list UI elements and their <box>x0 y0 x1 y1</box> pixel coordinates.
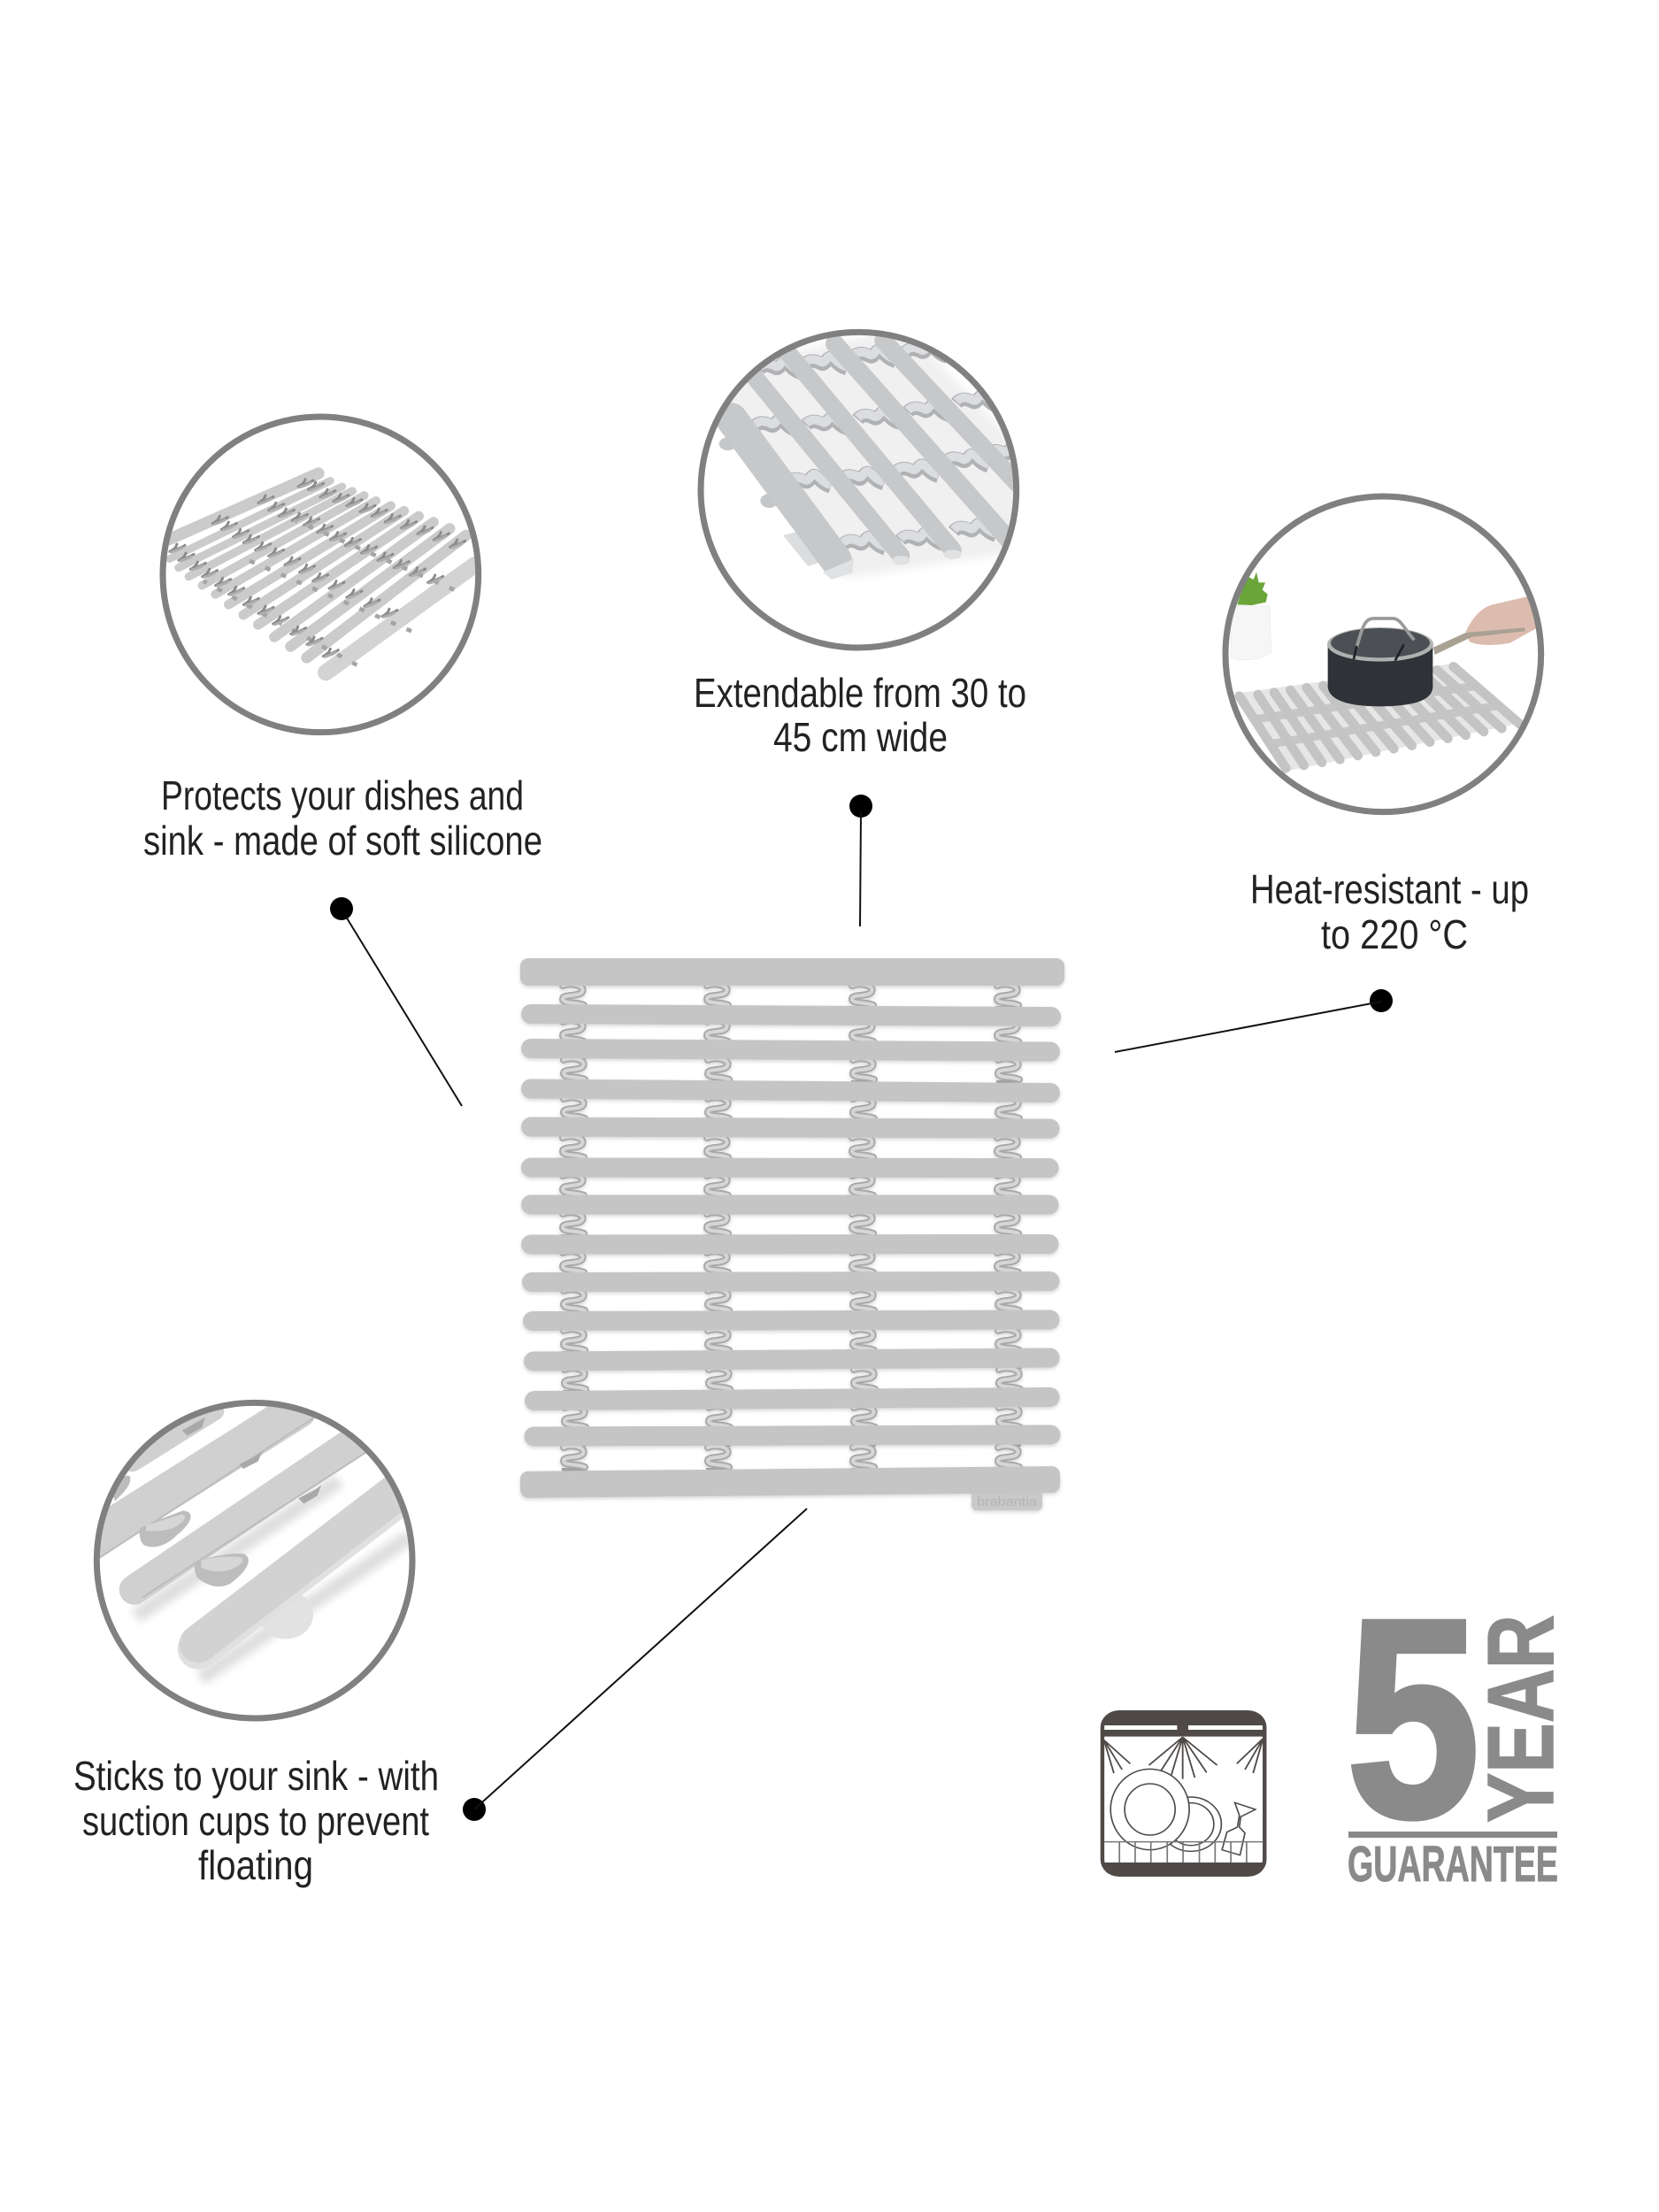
mat base tint <box>1237 664 1524 772</box>
word GUARANTEE: GUARANTEE <box>1348 1836 1558 1893</box>
pan <box>1327 618 1525 706</box>
soft shadows <box>135 1480 410 1678</box>
backdrop between bars <box>731 336 1013 577</box>
mat top bar <box>520 958 1064 986</box>
circle ring <box>163 417 479 733</box>
feature circle: hot pan on mat <box>1225 496 1541 812</box>
suction cups and logo tab <box>719 437 821 566</box>
mat bars under pan <box>1240 666 1520 768</box>
caption: protects dishes: sink - made of soft silicone <box>143 818 542 864</box>
feature circle: extendable close-up <box>701 327 1030 648</box>
rule <box>1348 1832 1557 1838</box>
caption: extendable: Extendable from 30 to <box>694 670 1026 716</box>
feature circle: full mat in perspective <box>163 417 479 733</box>
small tabs <box>182 1417 321 1503</box>
hook clips <box>111 1476 249 1586</box>
perspective tabs <box>204 518 454 665</box>
caption: suction cups: suction cups to prevent <box>82 1798 429 1844</box>
rack <box>1104 1842 1263 1863</box>
mat bars <box>531 1014 1051 1437</box>
water jets <box>1104 1737 1263 1779</box>
circle ring <box>701 332 1017 648</box>
close-up clips <box>755 344 1030 549</box>
badge: 5 year guarantee <box>1347 1561 1573 1893</box>
mat logo tab: brabantia <box>977 1494 1038 1509</box>
icon: dishwasher safe <box>1102 1710 1265 1877</box>
hand <box>1466 596 1537 645</box>
caption: protects dishes: Protects your dishes and <box>161 772 524 818</box>
caption: heat-resistant: to 220 °C <box>1321 911 1468 957</box>
caption: suction cups: Sticks to your sink - with <box>73 1753 439 1799</box>
mat connectors <box>561 983 1022 1470</box>
caption: heat-resistant <box>1250 866 1529 957</box>
mat cross connectors <box>1255 686 1497 744</box>
close-up bars <box>732 341 1018 560</box>
suction cup <box>262 1595 313 1639</box>
caption: suction cups <box>73 1753 439 1888</box>
small plate <box>1160 1797 1221 1851</box>
callout leader line: extendable <box>849 795 872 926</box>
main product: silicone sink mat <box>520 958 1064 1510</box>
caption: protects dishes <box>143 772 542 864</box>
circle ring <box>96 1402 412 1718</box>
callout leader line: suction cups <box>463 1509 807 1821</box>
rear bars <box>95 1409 370 1597</box>
mat logo tab <box>972 1486 1042 1510</box>
callout leader line: heat-resistant <box>1115 989 1393 1052</box>
feature circle: suction cup close-up <box>95 1402 436 1718</box>
bar end highlights <box>823 549 962 580</box>
perspective bars <box>168 473 475 672</box>
caption: heat-resistant: Heat-resistant - up <box>1250 866 1529 912</box>
front bar <box>198 1462 436 1648</box>
caption: suction cups: floating <box>198 1842 313 1888</box>
base band <box>1102 1863 1264 1877</box>
infographic canvas <box>74 329 1557 1888</box>
caption: extendable: 45 cm wide <box>773 714 948 760</box>
callout leader line: silicone <box>330 897 462 1106</box>
word YEAR: YEAR <box>1469 1615 1573 1823</box>
wine glass <box>1222 1802 1256 1855</box>
perspective clips <box>170 480 465 657</box>
circle ring <box>1225 496 1541 812</box>
numeral 5: 5 <box>1347 1561 1479 1876</box>
spray arm <box>1102 1710 1265 1737</box>
icon frame <box>1102 1712 1264 1875</box>
caption: extendable <box>694 670 1026 760</box>
large plate <box>1110 1769 1189 1850</box>
mat bottom bar <box>520 1466 1060 1498</box>
plant pot <box>1230 572 1271 660</box>
